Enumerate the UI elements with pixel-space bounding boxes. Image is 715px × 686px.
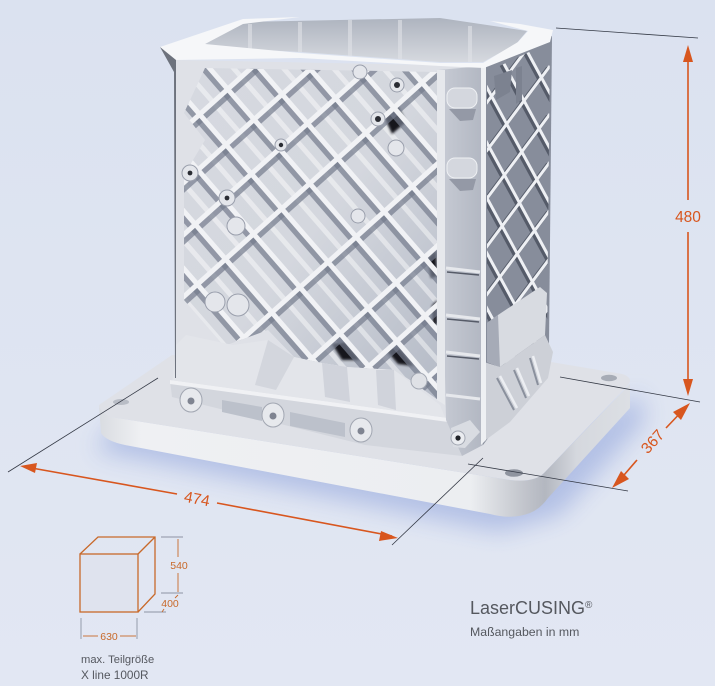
dark pockets xyxy=(332,106,437,366)
dimension: depth 367: 367 xyxy=(638,427,668,457)
rim interior opening xyxy=(205,18,527,62)
left edge of front face xyxy=(160,47,176,378)
cube dimension labels xyxy=(100,560,188,643)
base plate top face xyxy=(99,355,630,481)
cube dimension labels: 400 xyxy=(161,598,179,610)
rim surface xyxy=(160,17,553,68)
dimension extension lines xyxy=(8,28,700,545)
dimension: width 474: 474 xyxy=(183,489,212,510)
cube dimension arrows xyxy=(83,539,178,636)
dimension: width 474 xyxy=(20,463,398,541)
cell highlights xyxy=(184,68,437,377)
small cube diagram: max part size xyxy=(80,537,188,643)
corner column with lugs xyxy=(437,66,486,456)
unit note: Maßangaben in mm xyxy=(470,625,579,639)
base plate front and side edge xyxy=(99,384,630,517)
base plate shadow xyxy=(95,395,645,532)
side cover block xyxy=(487,287,547,367)
cube dimension labels: 540 xyxy=(170,560,188,572)
base plate xyxy=(99,355,630,517)
side upper dark recesses xyxy=(494,66,522,104)
caption: max part size: X line 1000R xyxy=(81,668,149,682)
front face xyxy=(170,60,483,456)
brand: LaserCUSING: LaserCUSING xyxy=(470,598,585,618)
gearbox housing casting xyxy=(160,17,553,456)
cube dimension guides xyxy=(81,537,183,639)
mounting holes xyxy=(113,375,617,477)
brand: LaserCUSING: ® xyxy=(585,600,593,611)
cube dimension labels: 630 xyxy=(100,631,118,643)
caption: max part size xyxy=(81,654,154,682)
dimension: height 480: 480 xyxy=(675,209,701,226)
corner bolt xyxy=(451,420,480,448)
dimension: height 480 xyxy=(675,45,701,396)
lower apron blocks xyxy=(172,335,446,420)
lattice bosses xyxy=(182,65,404,316)
bottom flange with bosses xyxy=(170,380,462,456)
side face: lattice xyxy=(483,36,553,445)
cube outline xyxy=(80,537,155,612)
lower side ribs xyxy=(483,335,553,442)
front face lattice xyxy=(182,64,437,400)
caption: max part size: max. Teilgröße xyxy=(81,654,154,666)
dimension: depth 367 xyxy=(612,403,690,488)
